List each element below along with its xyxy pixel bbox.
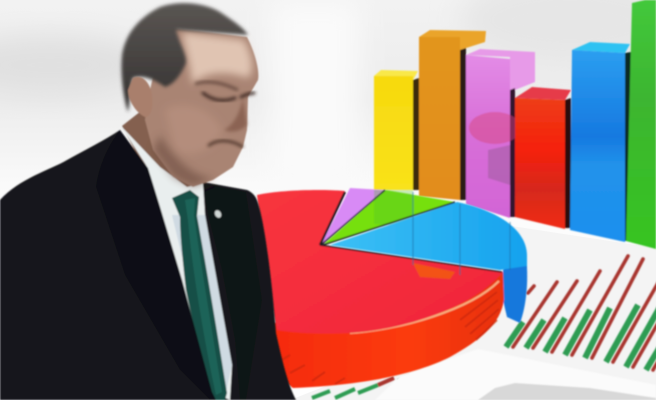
mouth	[208, 141, 243, 147]
bar: orange	[419, 30, 486, 200]
tie	[172, 190, 227, 400]
nose	[224, 98, 247, 132]
pie side ribs	[280, 292, 499, 384]
pie slice: red	[257, 190, 503, 334]
floor panel	[375, 349, 656, 400]
cheek highlight	[165, 105, 222, 154]
bar: yellow	[374, 70, 419, 190]
pie slice: green	[323, 190, 455, 245]
jaw shadow	[153, 135, 215, 187]
pie side: blue	[503, 256, 527, 323]
ear	[128, 77, 153, 117]
eyebrows	[195, 82, 238, 90]
right lapel	[203, 184, 262, 400]
bar: red	[515, 87, 571, 229]
green strips	[506, 298, 656, 370]
hair	[121, 3, 248, 112]
lower strips	[312, 376, 410, 398]
bar: green	[626, 0, 656, 249]
neck	[122, 100, 205, 190]
face	[145, 28, 258, 187]
red strips	[513, 256, 656, 370]
pie slice: purple	[321, 188, 384, 245]
eyes	[203, 93, 254, 100]
reflection on red slice	[413, 263, 455, 279]
pie slice dividers	[320, 190, 502, 272]
pie chart	[257, 188, 527, 388]
pie slice: blue	[330, 202, 527, 270]
left lapel	[96, 130, 216, 400]
shirt	[121, 126, 232, 400]
pie side: red	[270, 272, 504, 388]
bar: magenta	[466, 49, 535, 218]
forehead highlight	[182, 32, 252, 84]
bar chart	[374, 0, 656, 249]
lapel pin	[213, 209, 223, 219]
person	[0, 3, 296, 400]
bar reflections in pie	[413, 192, 510, 275]
suit	[0, 130, 296, 400]
line chart strips on floor	[312, 256, 656, 398]
pie rim highlight	[350, 281, 499, 333]
bar: blue	[570, 42, 631, 242]
